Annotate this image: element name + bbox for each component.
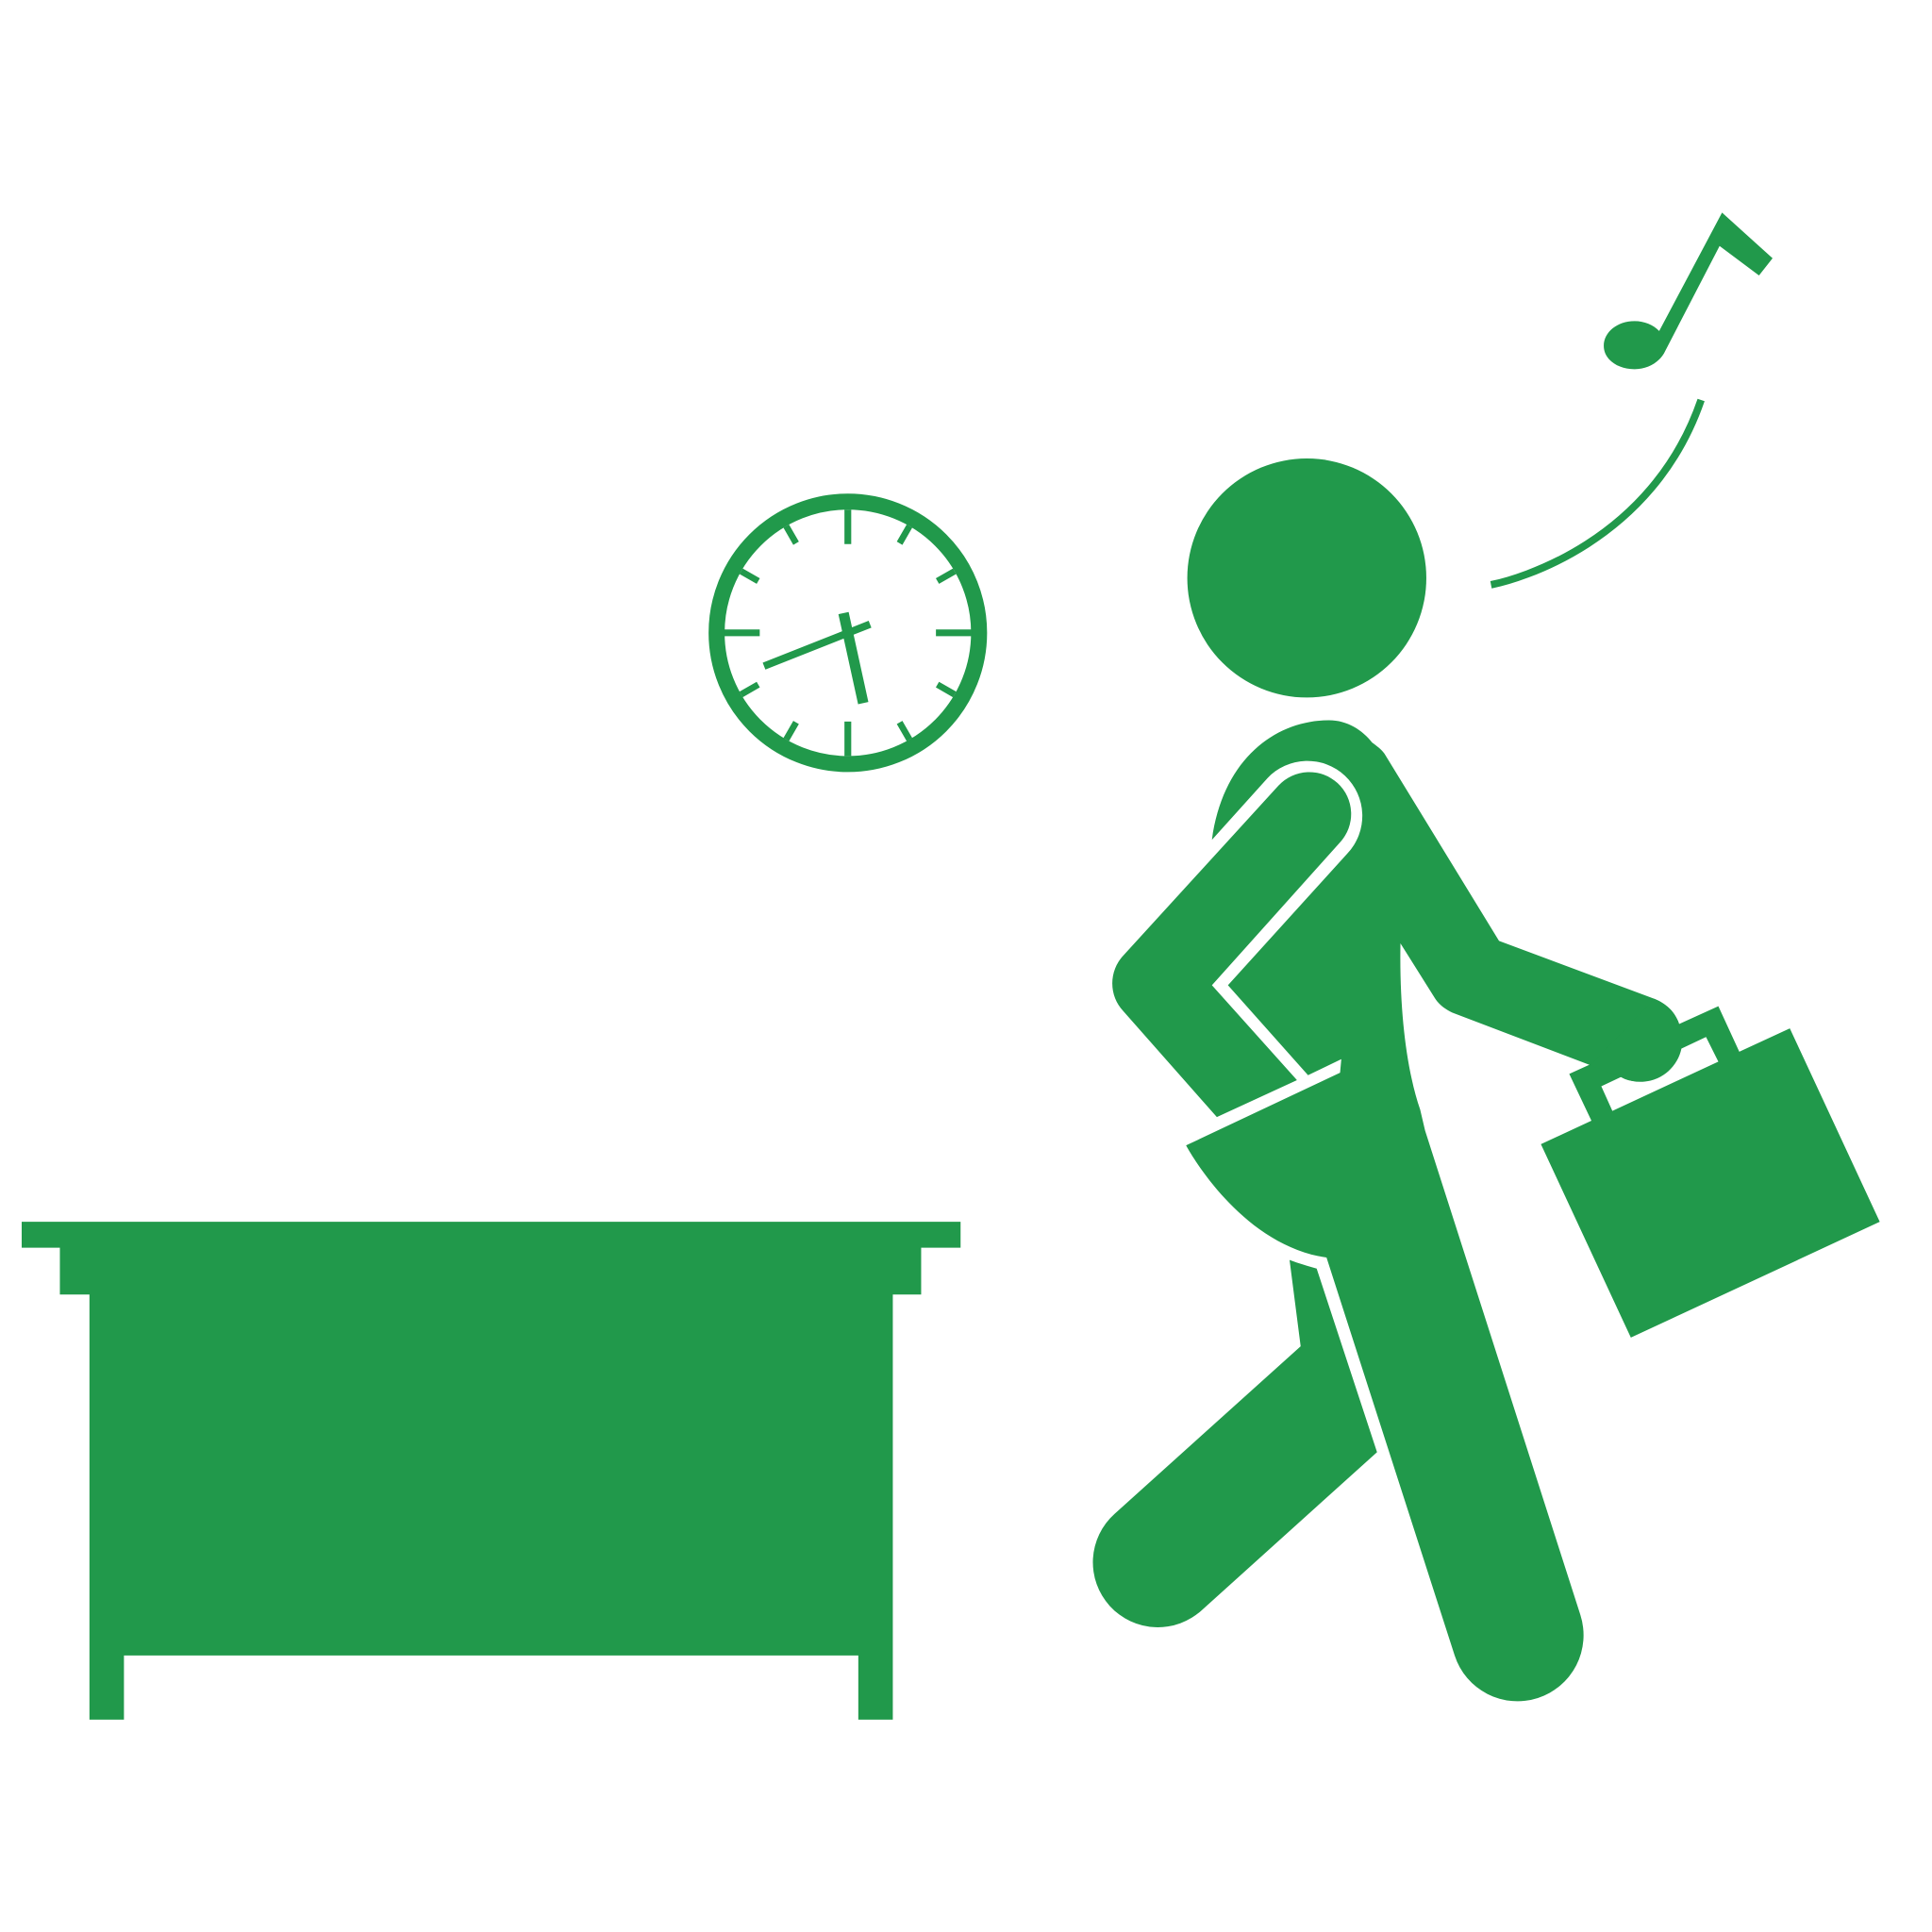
briefcase	[1541, 1007, 1880, 1338]
torso, rear arm and front leg	[1186, 721, 1680, 1701]
icon: walking person with briefcase	[1093, 458, 1880, 1701]
icon: music note	[1604, 212, 1773, 369]
hand gripping handle	[1591, 999, 1682, 1082]
front arm	[1112, 772, 1351, 1117]
back leg	[1093, 1260, 1377, 1627]
clock minute hand	[764, 625, 870, 666]
desk	[22, 1222, 960, 1720]
clock hour hand	[843, 613, 863, 703]
icon: wall clock	[717, 502, 979, 764]
clock hour ticks	[724, 509, 972, 756]
head	[1188, 458, 1426, 697]
whistling curve	[1491, 400, 1701, 585]
clock rim	[717, 502, 979, 764]
